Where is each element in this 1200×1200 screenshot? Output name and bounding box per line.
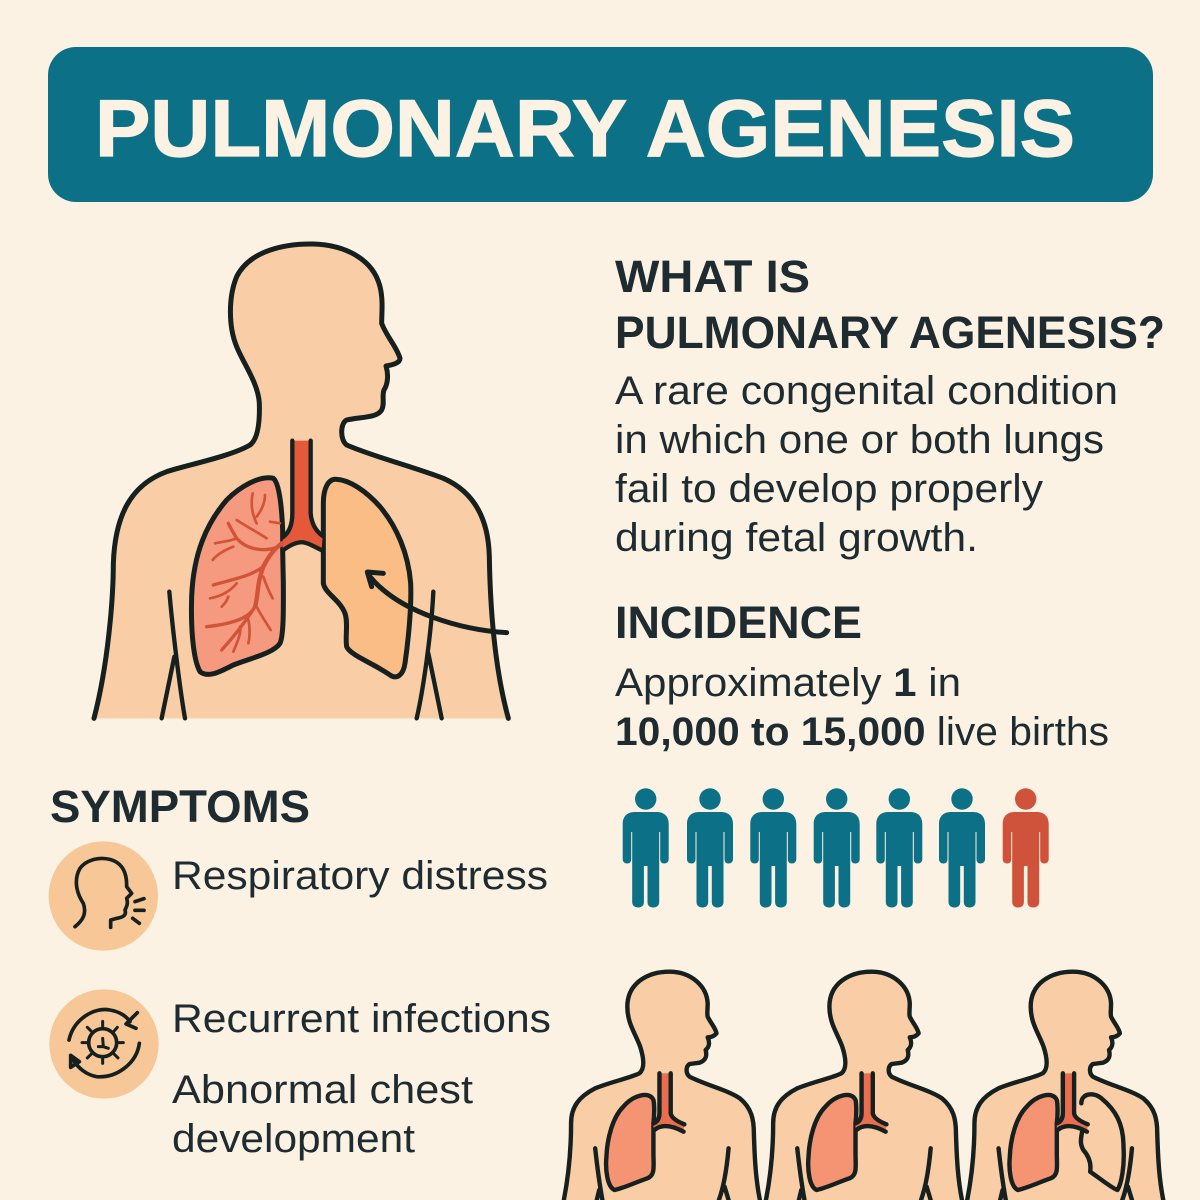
figure 2: single lung (766, 972, 962, 1200)
icon: recurrent infections (49, 989, 159, 1099)
symptom: abnormal chest development (172, 1068, 473, 1161)
arrow (367, 572, 507, 633)
main figure: torso with lungs (94, 244, 508, 718)
definition text: in which one or both lungs (615, 418, 1104, 462)
right lung (underdeveloped) (323, 479, 411, 677)
incidence text (615, 661, 1109, 754)
symptom: abnormal chest development: development (172, 1117, 415, 1161)
figure 3: one lung plus undeveloped outline (967, 972, 1163, 1200)
symptom: respiratory distress: Respiratory distress (172, 854, 548, 898)
title: PULMONARY AGENESIS (95, 84, 1075, 174)
ribs (162, 592, 442, 718)
incidence text: Approximately 1 in (615, 661, 961, 705)
incidence heading: INCIDENCE (615, 597, 862, 648)
pictogram: 1 affected among many (623, 788, 1049, 908)
incidence text: 10,000 to 15,000 live births (615, 710, 1109, 754)
symptoms heading: SYMPTOMS (50, 781, 310, 832)
figure 1: single lung (564, 972, 760, 1200)
definition text (615, 369, 1118, 560)
icon: respiratory distress (49, 841, 158, 951)
definition text: A rare congenital condition (615, 369, 1118, 413)
title banner (48, 47, 1153, 202)
definition heading (615, 251, 1165, 358)
trachea (283, 441, 323, 552)
left lung with vessels (191, 478, 283, 674)
figures: three torsos (564, 972, 1163, 1200)
symptom: recurrent infections: Recurrent infections (172, 997, 551, 1041)
symptom: abnormal chest development: Abnormal chest (172, 1068, 473, 1112)
definition heading: WHAT IS (615, 251, 810, 302)
definition heading: PULMONARY AGENESIS? (615, 307, 1165, 358)
definition text: fail to develop properly (615, 467, 1043, 511)
definition text: during fetal growth. (615, 516, 978, 560)
